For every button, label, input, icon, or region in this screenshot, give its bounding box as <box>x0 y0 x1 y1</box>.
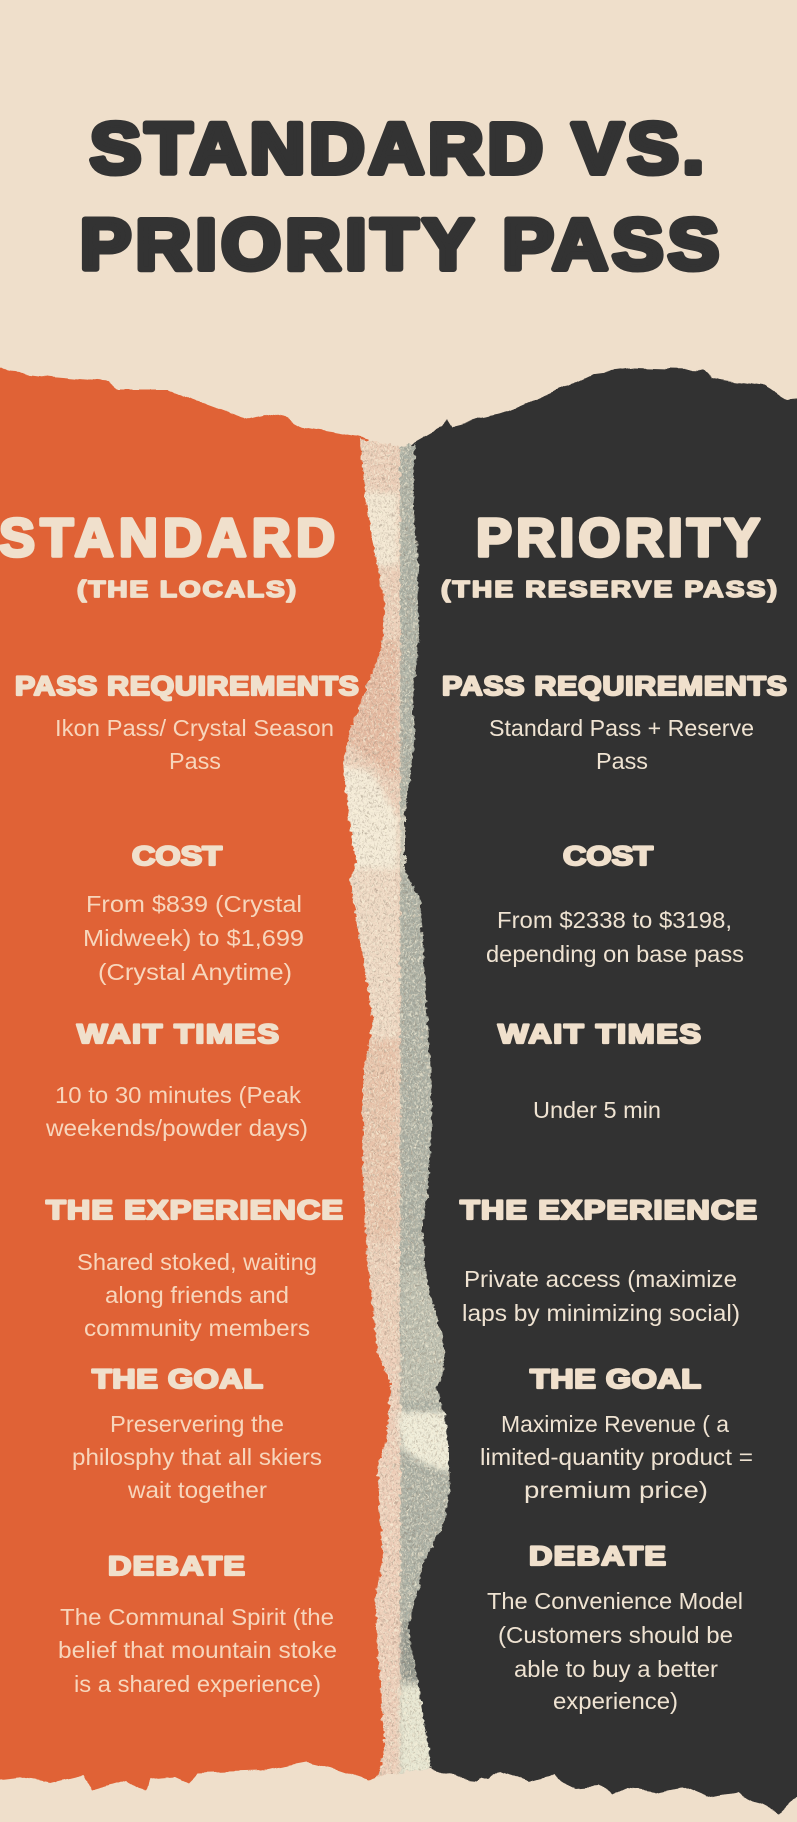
section: the experience: community members <box>84 1315 310 1341</box>
section: the goal: philosphy that all skiers <box>72 1444 322 1470</box>
section: the goal: THE GOAL <box>530 1364 701 1394</box>
section: wait times: weekends/powder days) <box>45 1115 308 1141</box>
section: the experience: THE EXPERIENCE <box>460 1195 757 1225</box>
section: debate: (Customers should be <box>498 1622 733 1648</box>
section: cost: COST <box>563 841 653 871</box>
section: the goal: limited-quantity product = <box>480 1444 753 1470</box>
title: PRIORITY PASS <box>80 205 719 284</box>
subheading: the reserve pass: (THE RESERVE PASS) <box>441 577 777 602</box>
section: debate: experience) <box>553 1688 678 1714</box>
section: cost: From $839 (Crystal <box>86 891 302 917</box>
heading: standard: STANDARD <box>0 508 335 568</box>
section: pass requirements: Ikon Pass/ Crystal Season <box>55 715 334 741</box>
section: debate: belief that mountain stoke <box>58 1637 337 1663</box>
section: the goal: wait together <box>127 1477 267 1503</box>
section: wait times: 10 to 30 minutes (Peak <box>55 1082 302 1108</box>
title <box>80 109 719 284</box>
section: the goal: Maximize Revenue ( a <box>501 1411 729 1437</box>
section: debate: able to buy a better <box>514 1656 718 1682</box>
section: cost: depending on base pass <box>486 941 744 967</box>
section: cost: Midweek) to $1,699 <box>83 925 304 951</box>
section: cost: COST <box>132 841 222 871</box>
torn paper divider <box>343 438 451 1777</box>
section: wait times: WAIT TIMES <box>498 1019 701 1049</box>
section: the experience: Shared stoked, waiting <box>77 1249 317 1275</box>
section: the experience: along friends and <box>105 1282 289 1308</box>
section: cost <box>486 841 744 967</box>
section: pass requirements <box>15 671 359 774</box>
section: pass requirements <box>442 671 787 774</box>
section: the goal: THE GOAL <box>92 1364 263 1394</box>
section: pass requirements: Pass <box>596 748 648 774</box>
section: pass requirements: PASS REQUIREMENTS <box>15 671 359 702</box>
section: wait times: WAIT TIMES <box>77 1019 279 1049</box>
section: the goal: premium price) <box>524 1477 708 1503</box>
panel: priority <box>397 368 797 1814</box>
section: cost: From $2338 to $3198, <box>497 907 732 933</box>
heading: priority: PRIORITY <box>476 508 760 568</box>
section: the experience <box>460 1195 757 1326</box>
section: the experience <box>46 1195 343 1341</box>
section: wait times <box>45 1019 308 1141</box>
section: the experience: Private access (maximize <box>464 1266 737 1292</box>
section: cost <box>83 841 304 985</box>
section: the goal <box>72 1364 322 1503</box>
section: debate: DEBATE <box>108 1551 245 1581</box>
section: wait times <box>498 1019 701 1123</box>
section: debate <box>58 1551 337 1697</box>
section: pass requirements: Standard Pass + Reserve <box>489 715 754 741</box>
section: pass requirements: PASS REQUIREMENTS <box>442 671 787 702</box>
section: debate: The Convenience Model <box>487 1588 743 1614</box>
panel: standard <box>0 367 398 1791</box>
section: debate <box>487 1541 743 1714</box>
section: the goal <box>480 1364 753 1503</box>
section: the experience: laps by minimizing social) <box>462 1300 740 1326</box>
section: debate: DEBATE <box>529 1541 666 1571</box>
section: pass requirements: Pass <box>169 748 221 774</box>
section: the experience: THE EXPERIENCE <box>46 1195 343 1225</box>
section: debate: The Communal Spirit (the <box>60 1604 334 1630</box>
section: the goal: Preservering the <box>110 1411 284 1437</box>
subheading: the locals: (THE LOCALS) <box>77 577 296 602</box>
section: wait times: Under 5 min <box>533 1097 661 1123</box>
orange torn paper <box>0 367 398 1791</box>
section: cost: (Crystal Anytime) <box>98 959 292 985</box>
dark torn paper <box>397 368 797 1814</box>
section: debate: is a shared experience) <box>74 1671 321 1697</box>
title: STANDARD VS. <box>90 109 704 188</box>
